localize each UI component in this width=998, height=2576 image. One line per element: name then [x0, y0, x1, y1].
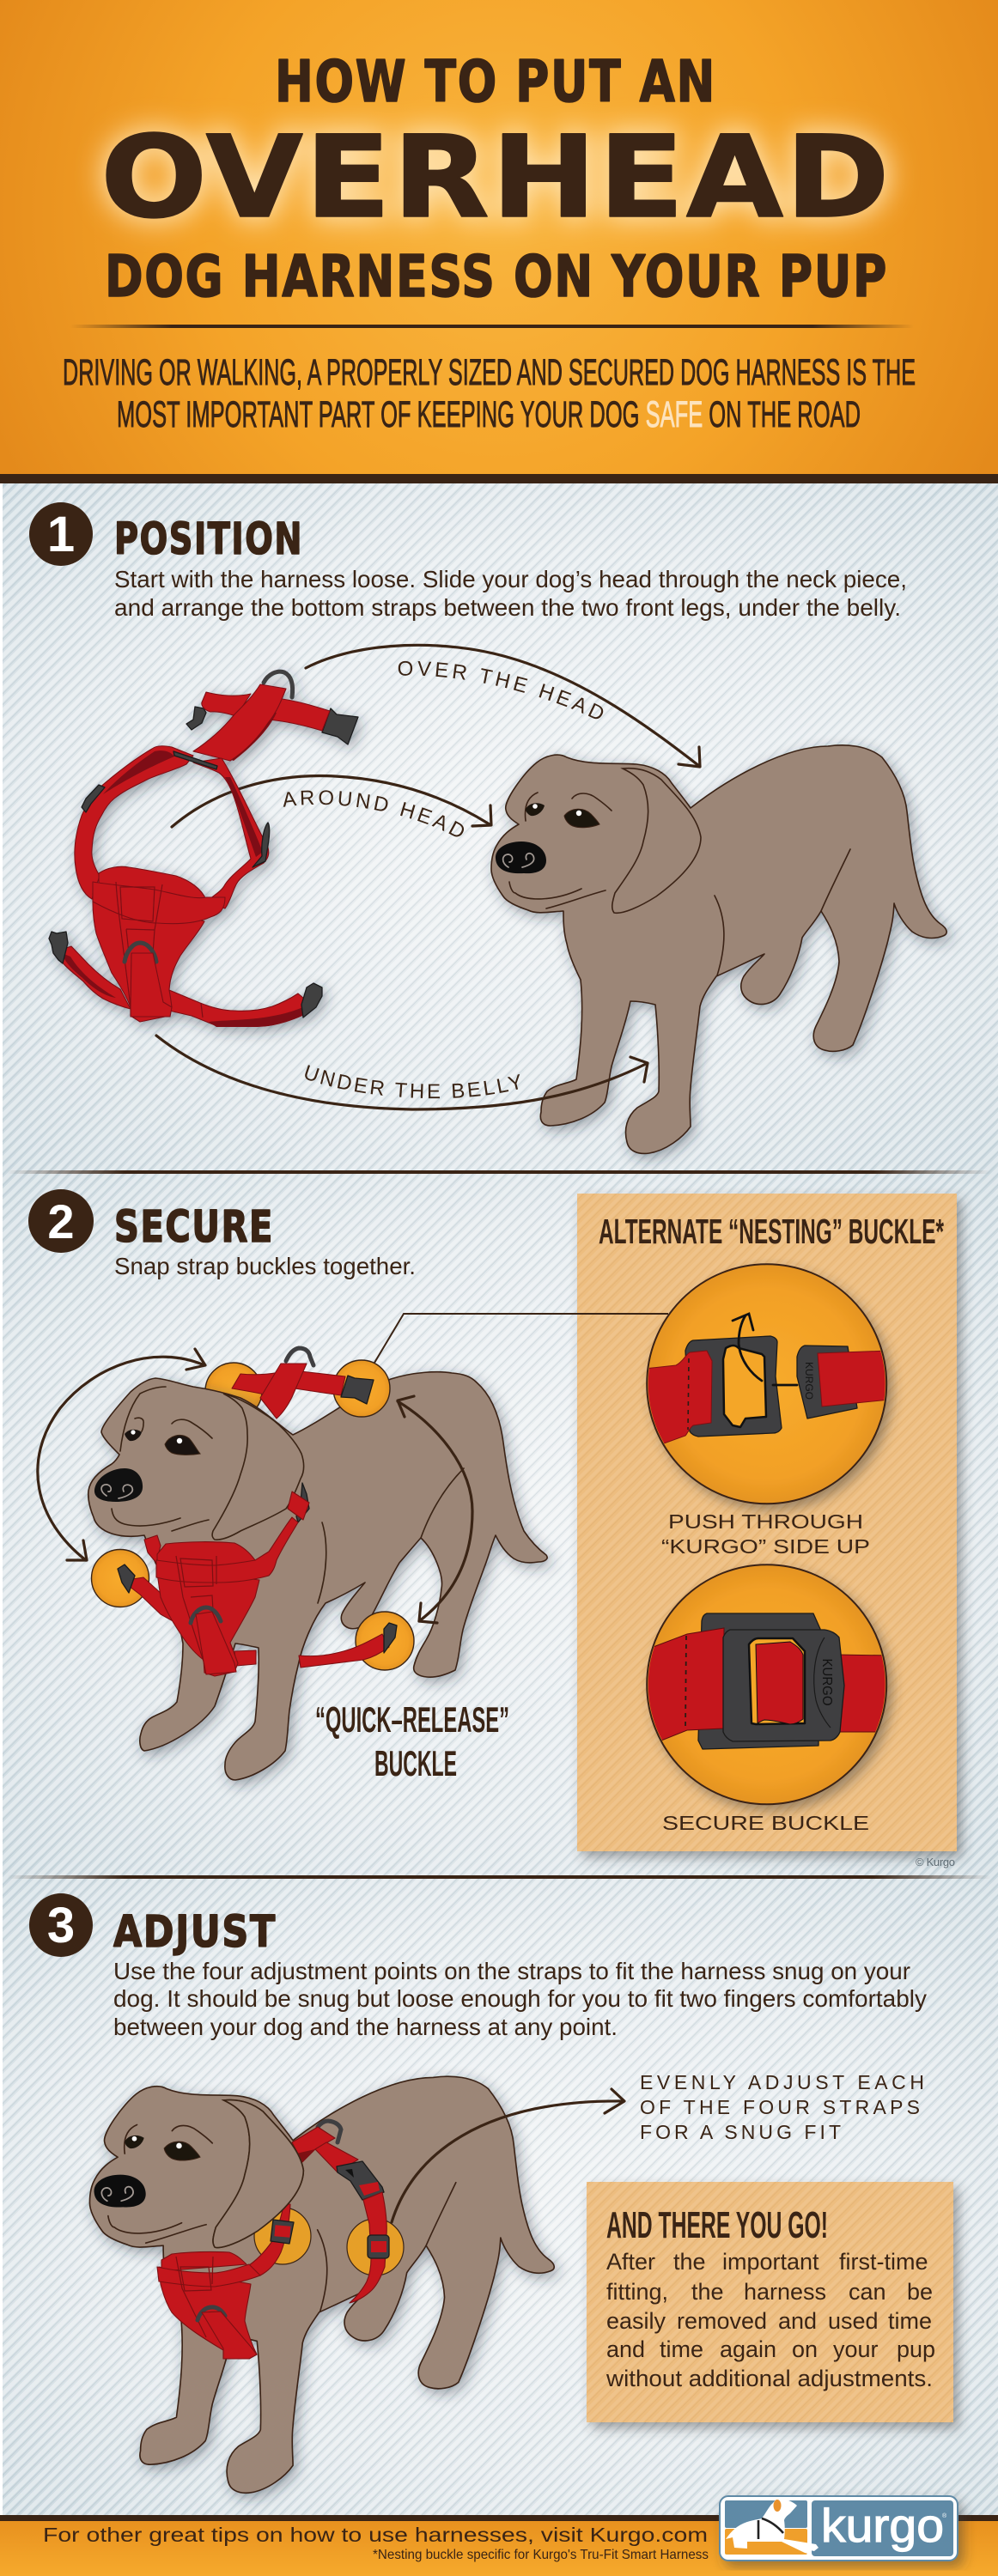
footnote: *Nesting buckle specific for Kurgo's Tru-Fit Smart Harness [373, 2548, 709, 2562]
arrow: adjust each strap [392, 2089, 624, 2222]
text: adjust instructions: Use the four adjustment points on the straps to fit the harness snug on your [113, 1958, 910, 1984]
label: evenly adjust [640, 2071, 924, 2143]
title [100, 48, 892, 310]
header background [0, 0, 998, 474]
panel: step 3 adjust [29, 1893, 953, 2493]
label: secure buckle: SECURE BUCKLE [662, 1812, 869, 1834]
label: evenly adjust: OF THE FOUR STRAPS [640, 2096, 920, 2118]
text: closing paragraph: important [722, 2249, 819, 2275]
text: closing paragraph: removed [677, 2308, 767, 2334]
text: closing paragraph: easily [606, 2308, 666, 2334]
dog: secure [88, 1372, 547, 1780]
dog: position [491, 745, 946, 1153]
text: closing paragraph: used [828, 2308, 879, 2334]
step number 2: 2 [47, 1194, 75, 1249]
label: push through: PUSH THROUGH [668, 1510, 863, 1533]
harness: chest and lower straps [118, 1483, 397, 1676]
subtitle: MOST IMPORTANT PART OF KEEPING YOUR DOG SAFE ON THE ROAD [117, 394, 861, 435]
label: quick-release buckle: BUCKLE [374, 1743, 457, 1783]
orange dot: top left [205, 1363, 262, 1419]
text: closing paragraph: can [849, 2279, 886, 2305]
footer [0, 2496, 998, 2576]
text: closing paragraph: time [888, 2308, 932, 2334]
step number 2 [28, 1189, 94, 1253]
label: quick-release buckle [315, 1699, 509, 1783]
text: closing paragraph: harness [744, 2279, 826, 2305]
heading: and there you go: AND THERE YOU GO! [606, 2204, 828, 2246]
illustration: push through [644, 1264, 890, 1504]
heading: position: POSITION [114, 514, 303, 565]
label: push through: “KURGO” SIDE UP [661, 1535, 870, 1558]
orange dots: adjustment points [254, 2208, 404, 2275]
text: closing paragraph: first-time [839, 2249, 928, 2275]
step number 3: 3 [47, 1898, 75, 1953]
panel: step 2 secure [28, 1189, 957, 1868]
title: HOW TO PUT AN [275, 48, 716, 115]
dog ear and face: secure [94, 1387, 464, 1603]
text: closing paragraph: and [778, 2308, 817, 2334]
text: closing paragraph: After [606, 2249, 655, 2275]
label: evenly adjust: EVENLY ADJUST EACH [640, 2071, 924, 2093]
subtitle [63, 352, 916, 435]
harness: top straps [232, 1348, 374, 1419]
text: closing paragraph: the [691, 2279, 724, 2305]
panel: alternate nesting buckle [577, 1194, 957, 1851]
label: quick-release buckle: “QUICK–RELEASE” [315, 1699, 509, 1740]
arrow: over the head [306, 645, 700, 767]
text: position instructions: Start with the harness loose. Slide your dog’s head through the neck piece, [114, 566, 907, 592]
arrow: around head [172, 775, 491, 827]
dog: adjust [89, 2076, 554, 2493]
step number 1: 1 [47, 507, 75, 562]
text: position instructions [114, 566, 907, 621]
section backgrounds [0, 483, 998, 2517]
harness: fitted on dog [157, 2121, 389, 2359]
arrow: under the belly [156, 1036, 648, 1109]
text: position instructions: and arrange the bottom straps between the two front legs, under the belly. [114, 594, 901, 621]
text: closing paragraph [605, 2249, 935, 2391]
logo: kurgo: ® [942, 2512, 947, 2519]
title: OVERHEAD [100, 112, 892, 244]
text: closing paragraph: fitting, [606, 2279, 668, 2305]
credit: © Kurgo [916, 1856, 955, 1868]
text: closing paragraph: time [660, 2336, 703, 2362]
text: closing paragraph: be [907, 2279, 933, 2305]
illustration: secure buckle: KURGO [819, 1659, 834, 1705]
leader line [374, 1314, 668, 1363]
text: closing paragraph: again [720, 2336, 776, 2362]
text: closing paragraph: on [792, 2336, 818, 2362]
arrow: upper buckle pair [38, 1349, 205, 1560]
illustration: secure buckle [644, 1564, 890, 1804]
step number 3 [29, 1893, 93, 1957]
logo: kurgo: kurgo [821, 2499, 944, 2552]
illustration: push through: KURGO [803, 1362, 815, 1400]
label: over the head: OVER THE HEAD [399, 661, 603, 720]
label: under the belly: UNDER THE BELLY [305, 1065, 520, 1099]
text: closing paragraph: pup [897, 2336, 935, 2362]
heading: adjust: ADJUST [113, 1907, 277, 1958]
text: secure instructions: Snap strap buckles together. [114, 1253, 416, 1279]
label: evenly adjust: FOR A SNUG FIT [640, 2121, 841, 2143]
orange dot: top right [333, 1360, 390, 1417]
card: and there you go [587, 2182, 953, 2422]
text: adjust instructions: dog. It should be snug but loose enough for you to fit two fingers comfortably [113, 1985, 927, 2012]
text: closing paragraph: and [606, 2336, 645, 2362]
text: closing paragraph: without additional adjustments. [605, 2366, 933, 2391]
text: adjust instructions [113, 1958, 927, 2040]
step number 1 [29, 502, 93, 566]
panel: step 1 position [29, 502, 957, 1168]
text: adjust instructions: between your dog and the harness at any point. [113, 2014, 618, 2040]
text: closing paragraph: your [833, 2336, 879, 2362]
dog ear overlay: adjust [213, 2100, 303, 2248]
orange dots: lower [91, 1549, 414, 1670]
illustration: loose harness [49, 671, 358, 1027]
text: closing paragraph: the [673, 2249, 706, 2275]
title: OVERHEAD [100, 112, 892, 244]
heading: secure: SECURE [114, 1202, 274, 1253]
header band [0, 474, 998, 483]
label: push through [661, 1510, 870, 1558]
logo: kurgo [720, 2496, 958, 2561]
footer text: For other great tips on how to use harnesses, visit Kurgo.com [43, 2524, 708, 2546]
label: around head: AROUND HEAD [283, 790, 464, 836]
arrow: lower buckle pair [398, 1396, 472, 1623]
